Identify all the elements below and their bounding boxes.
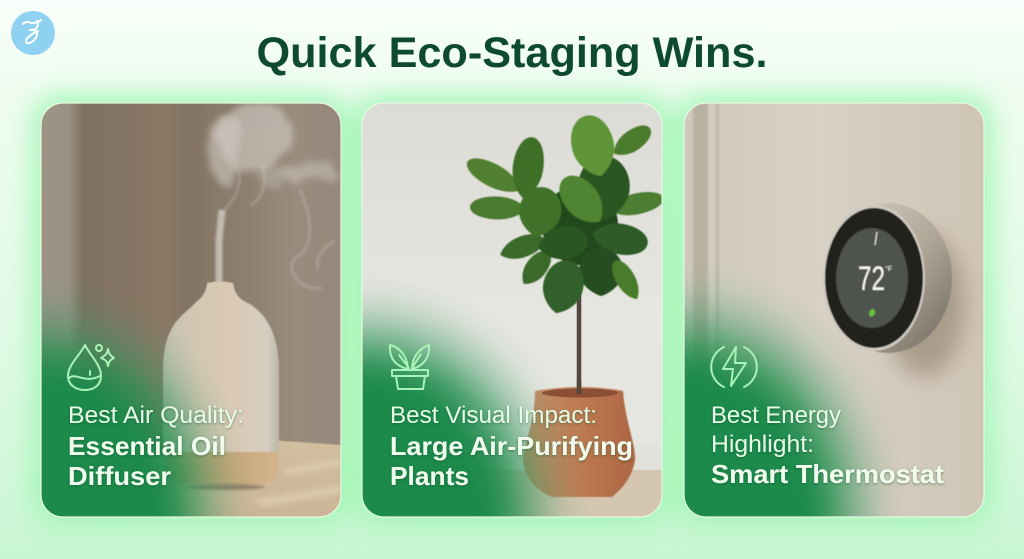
text: best visual impact: Large Air-Purifying [390,431,633,461]
photo: floor [500,470,662,516]
text: best energy highlight [711,402,944,489]
photo: white wall [362,104,662,446]
photo: fiddle-leaf fig trunk [577,290,581,396]
text: best energy highlight: Smart Thermostat [711,459,944,489]
text: best visual impact [390,402,633,491]
photo: thermostat: °F [885,265,892,273]
photo: door frame [692,104,720,344]
card border [41,103,341,517]
icon: potted plant [390,345,429,389]
text: best energy highlight: Best Energy [711,402,842,429]
photo: beige wall [684,103,984,517]
photo: thermostat shadow [885,233,965,377]
green gradient overlay [42,292,244,516]
photo: fiddle-leaf fig foliage [462,111,666,318]
photo: table light streaks [250,458,341,507]
text: best visual impact: Plants [390,461,469,491]
text: best air quality: Best Air Quality: [68,402,244,429]
card border [684,103,984,517]
photo: curtained room background [42,104,340,454]
panel: essential oil diffuser [41,101,341,517]
text: best energy highlight: Highlight: [711,431,814,458]
photo: thermostat: 72 [858,260,885,298]
panel: smart thermostat [684,103,984,517]
photo: diffuser body [163,282,279,455]
text: best air quality: Essential Oil [68,431,226,461]
text: best air quality: Diffuser [68,461,171,491]
green gradient overlay [684,277,896,516]
photo: wooden table [162,440,340,516]
card border [362,103,662,517]
icon: water drop with sparkle [68,345,114,390]
photo: rising mist [210,101,338,288]
panel: air-purifying plants [362,103,666,517]
photo: thermostat [823,203,952,353]
photo: terracotta pot [523,387,635,497]
text: best visual impact: Best Visual Impact: [390,402,597,429]
text: best air quality [68,402,244,491]
logo [11,11,55,55]
photo: diffuser wooden base [163,452,279,484]
card glow [33,95,992,525]
green gradient overlay [362,284,578,516]
icon: lightning bolt in circle [711,347,757,387]
title: Quick Eco-Staging Wins. [256,29,768,77]
